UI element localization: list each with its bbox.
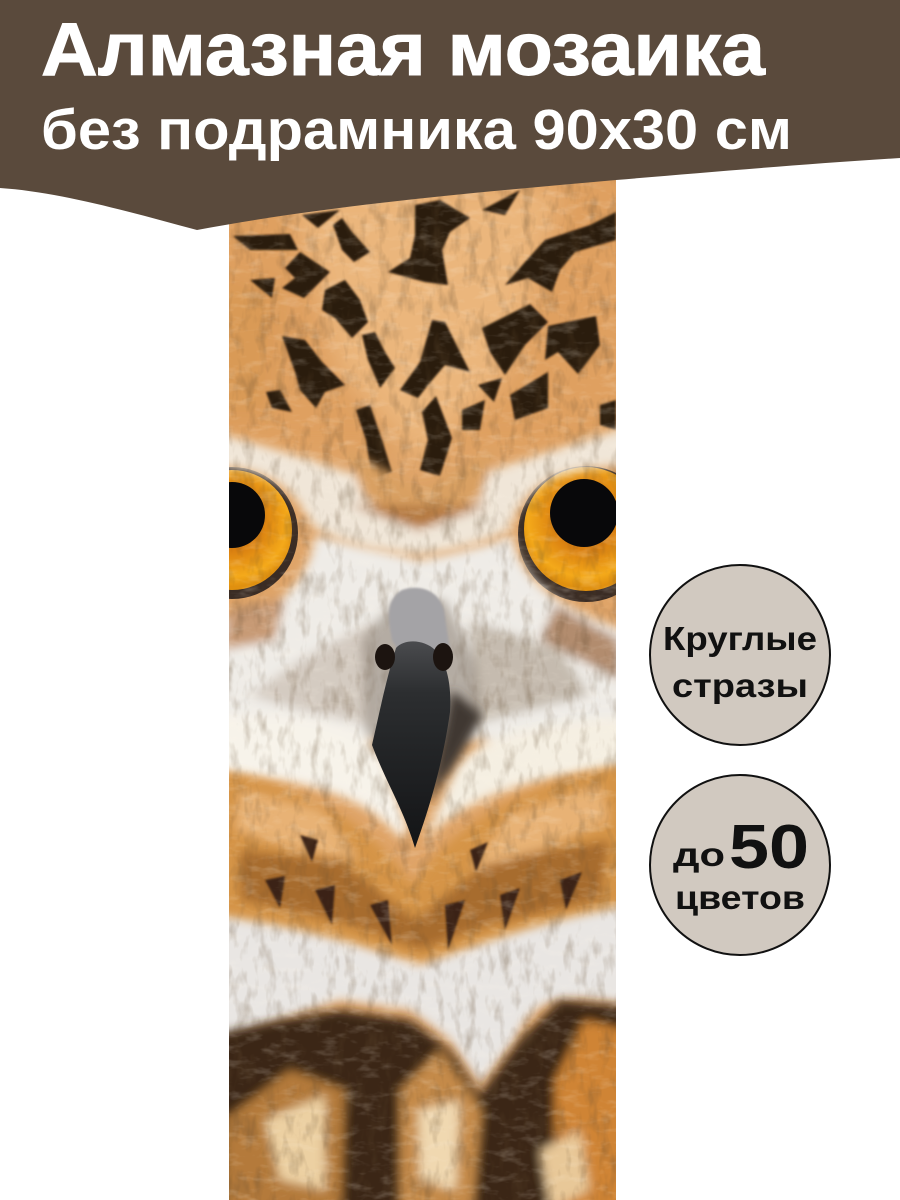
brow feathers over the eyes [229, 422, 616, 560]
header banner [0, 0, 900, 230]
badge: up to 50 colours: цветов [675, 879, 805, 916]
badge: round rhinestones: Круглые [663, 620, 817, 657]
white facial feathers [229, 531, 616, 842]
subtitle: без подрамника 90х30 см [41, 98, 792, 162]
badge: round rhinestones: стразы [672, 667, 808, 704]
lower brown plumage [229, 992, 616, 1200]
chest dark specks [265, 835, 582, 950]
chest orange feathers [229, 760, 616, 964]
white neck band [229, 900, 616, 1087]
forehead feathers [229, 191, 552, 452]
beak [362, 588, 482, 848]
badge: up to 50 colours: до [673, 836, 725, 873]
dark forehead marks [233, 190, 616, 480]
left eye [229, 467, 298, 599]
feather texture [229, 175, 616, 1200]
title: Алмазная мозаика [41, 7, 766, 91]
photo: owl face [229, 180, 616, 1200]
right eye [518, 466, 616, 602]
pupils [199, 479, 618, 548]
badge: up to 50 colours [650, 775, 830, 955]
badge: round rhinestones [650, 565, 830, 745]
badge: up to 50 colours: 50 [729, 813, 809, 882]
